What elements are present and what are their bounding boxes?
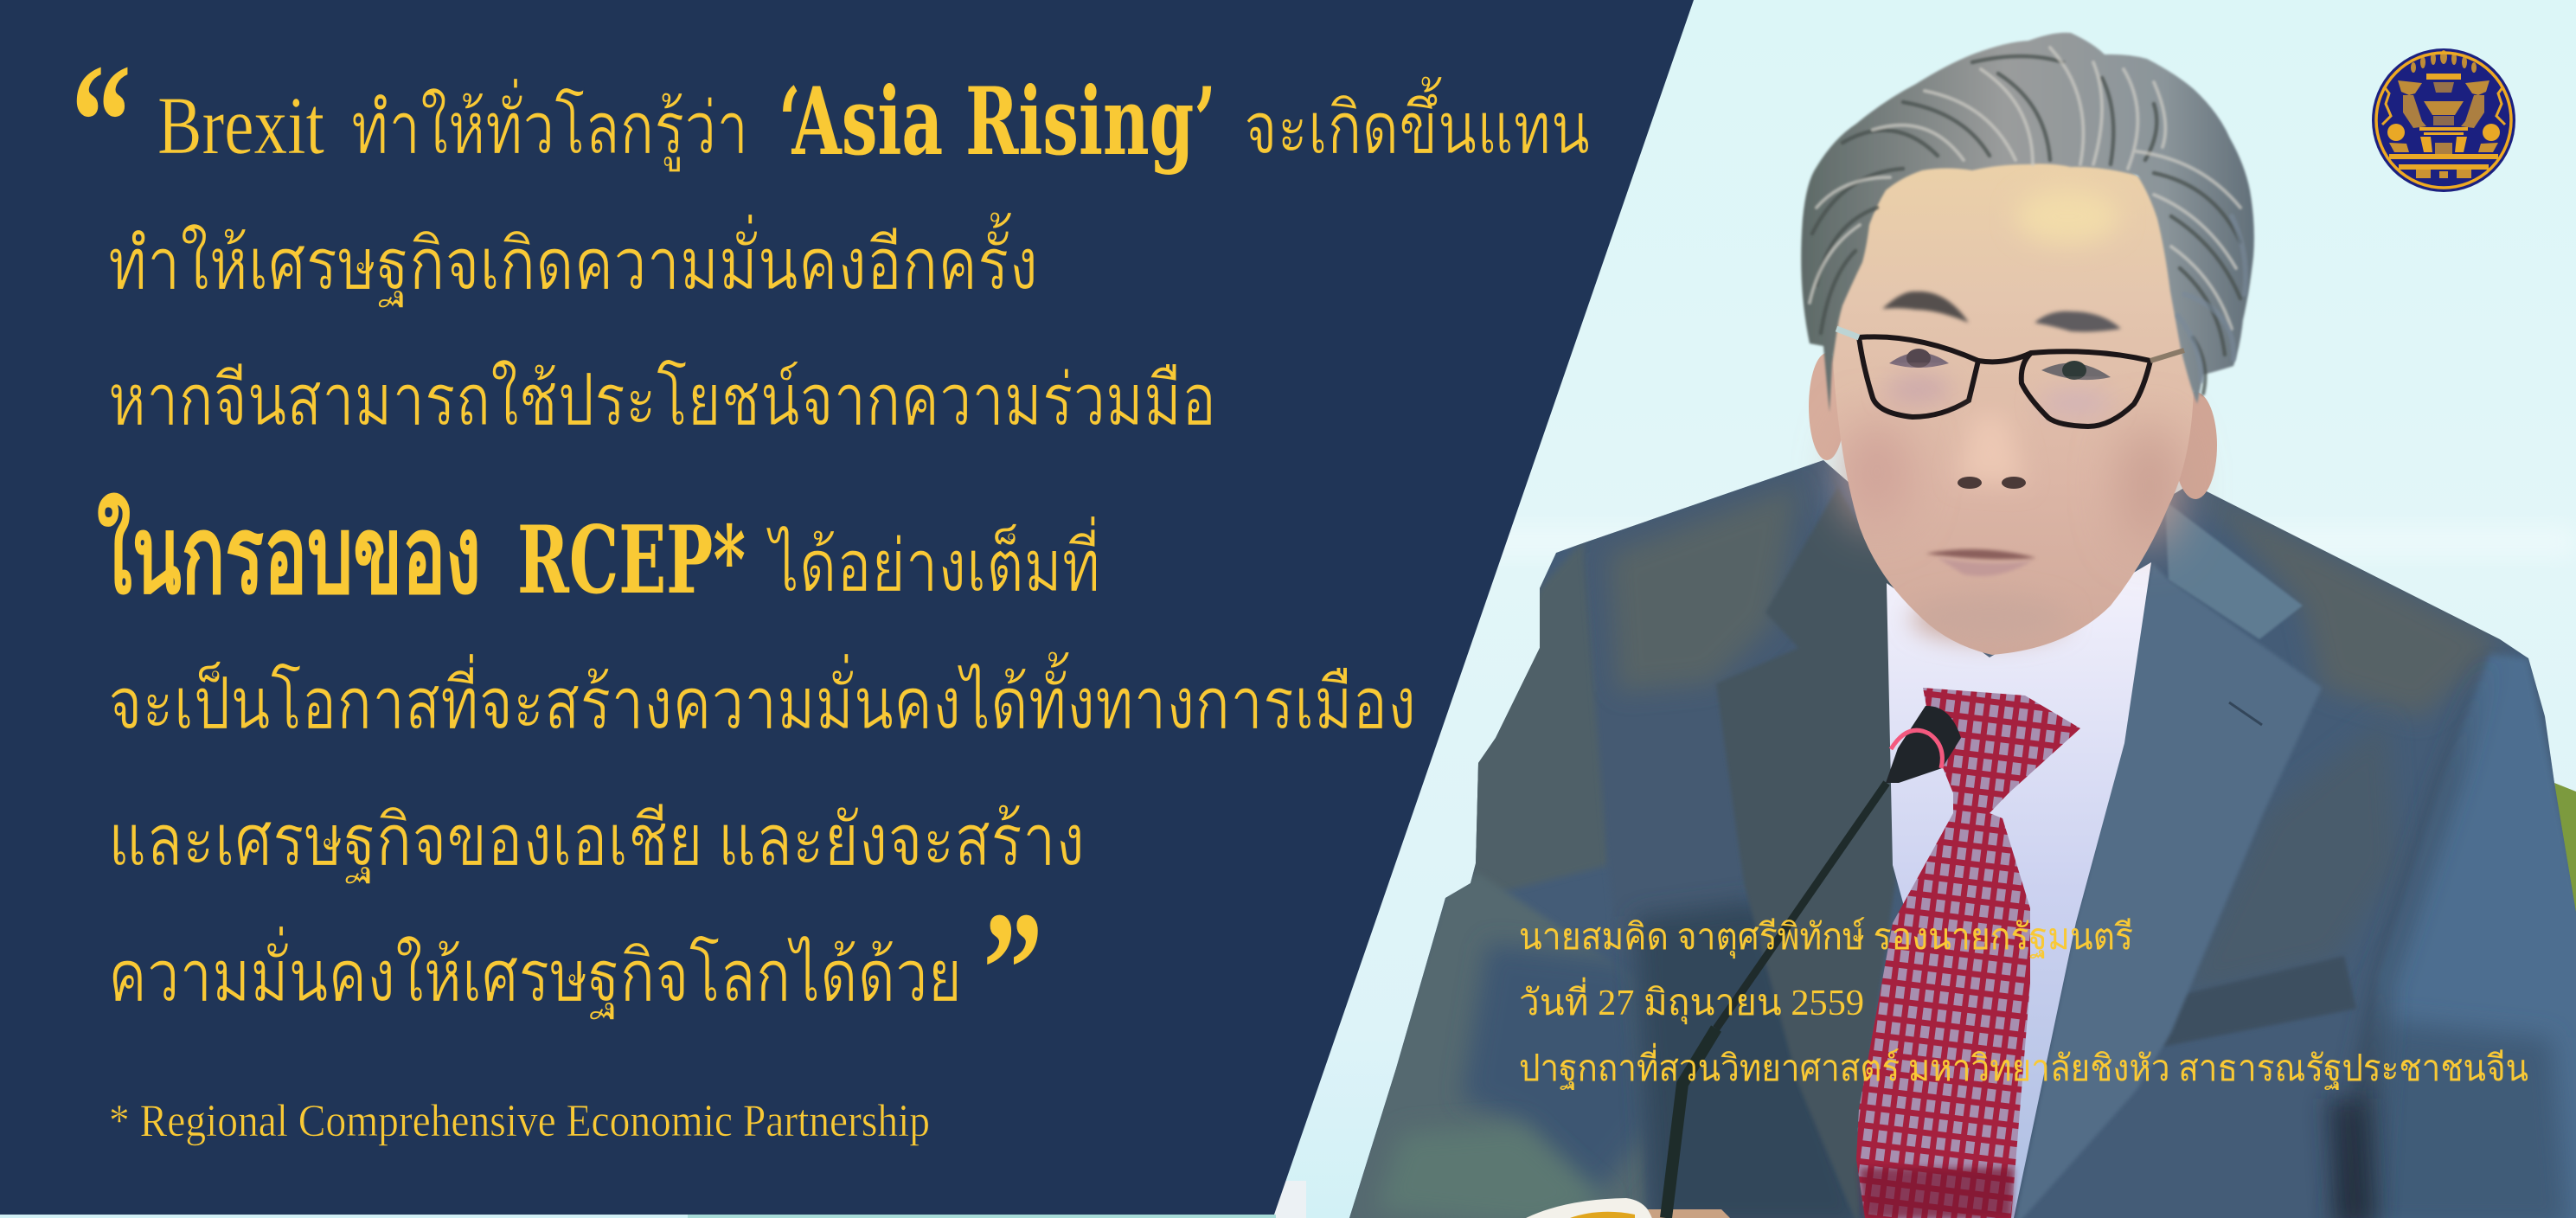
seal flames — [2411, 50, 2477, 73]
icon: government seal — [2372, 48, 2515, 192]
eyebrows — [1882, 292, 1969, 323]
seal left lion — [2382, 80, 2426, 152]
seal centre: vase and table — [2389, 74, 2498, 178]
quote text — [71, 31, 1590, 1061]
tie — [1856, 688, 2080, 1218]
caption: speaker attribution: วันที่ 27 มิถุนายน 2559 — [1519, 978, 1864, 1025]
seal right lion — [2461, 80, 2505, 152]
right shoulder — [2191, 484, 2500, 718]
microphone — [1666, 706, 1961, 1218]
left chest — [1582, 460, 1823, 818]
line 1 — [157, 67, 1590, 176]
line 7: ความมั่นคงให้เศรษฐกิจโลกได้ด้วย — [108, 926, 962, 1020]
caption: speaker attribution: นายสมคิด จาตุศรีพิทักษ์ รองนายกรัฐมนตรี — [1519, 917, 2133, 959]
line 6: และเศรษฐกิจของเอเชีย และยังจะสร้าง — [108, 801, 1085, 884]
nose — [1957, 415, 2026, 489]
right collar — [2165, 501, 2303, 639]
left forearm — [1341, 874, 1648, 1218]
face — [1832, 147, 2194, 655]
sleeve shadow — [2337, 701, 2481, 1218]
line 2: ทำให้เศรษฐกิจเกิดความมั่นคงอีกครั้ง — [108, 212, 1038, 308]
cuff and hand — [1526, 1198, 1730, 1218]
opening quote mark: “ — [71, 31, 131, 213]
eyes — [1886, 349, 2112, 415]
closing quote mark: ” — [983, 879, 1043, 1061]
photo: speaker — [1341, 33, 2576, 1218]
right sleeve — [2354, 654, 2576, 1218]
pocket — [2163, 956, 2356, 1047]
line 5: จะเป็นโอกาสที่จะสร้างความมั่นคงได้ทั้งทางการเมือง — [108, 651, 1416, 745]
line 4: ในกรอบของ — [97, 493, 481, 617]
ears — [1809, 353, 1845, 460]
line 4 — [97, 493, 1100, 617]
line 4: ได้อย่างเต็มที่ — [766, 516, 1100, 607]
hair — [1801, 33, 2254, 413]
line 1: ทำให้ทั่วโลกรู้ว่า — [351, 78, 748, 172]
line 1: ‘Asia Rising’ — [779, 67, 1216, 176]
line 4: RCEP* — [517, 506, 746, 615]
line 3: หากจีนสามารถใช้ประโยชน์จากความร่วมมือ — [108, 359, 1216, 441]
suit jacket — [1341, 450, 2576, 1218]
line 1: จะเกิดขึ้นแทน — [1244, 76, 1590, 170]
left shoulder and upper sleeve — [1471, 542, 1606, 889]
right chest shadow — [2200, 740, 2389, 981]
lower front panel — [1635, 900, 1868, 1218]
line 1: Brexit — [157, 80, 324, 171]
mouth — [1926, 549, 2036, 576]
glasses — [1836, 329, 2184, 426]
left lapel — [1716, 460, 1895, 1218]
panel: navy quote background — [0, 0, 1694, 1215]
shirt — [1887, 562, 2151, 1218]
footnote: * Regional Comprehensive Economic Partnership — [109, 1096, 930, 1146]
right lower lapel — [2014, 563, 2322, 1218]
caption: speaker attribution — [1519, 917, 2528, 1090]
